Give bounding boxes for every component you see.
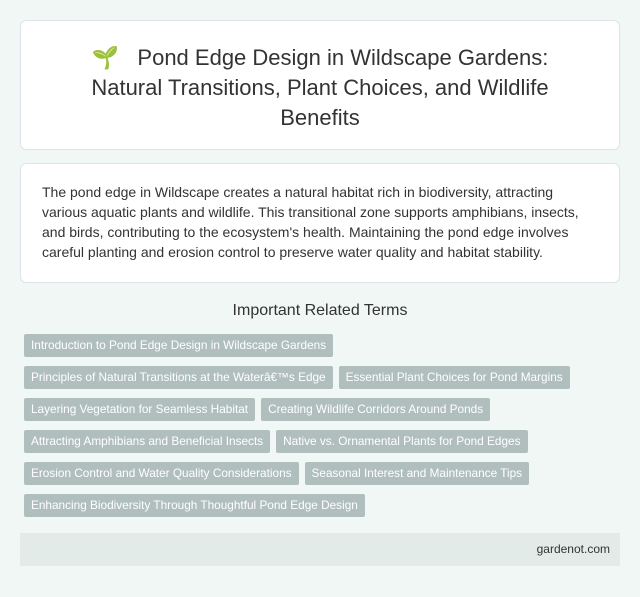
tag 8: Erosion Control and Water Quality Considerations xyxy=(31,466,292,480)
tag 9 xyxy=(305,462,529,485)
tag 4 xyxy=(24,398,255,421)
tag 8 xyxy=(24,462,299,485)
tag 3: Essential Plant Choices for Pond Margins xyxy=(346,370,563,384)
title card xyxy=(20,20,620,150)
tags xyxy=(24,334,570,517)
tag 2 xyxy=(24,366,333,389)
tag 9: Seasonal Interest and Maintenance Tips xyxy=(312,466,522,480)
tag 7 xyxy=(276,430,528,453)
tag 6 xyxy=(24,430,270,453)
tag 2: Principles of Natural Transitions at the Waterâ€™s Edge xyxy=(31,370,326,384)
tag 1 xyxy=(24,334,333,357)
tag 5 xyxy=(261,398,490,421)
tag 5: Creating Wildlife Corridors Around Ponds xyxy=(268,402,483,416)
tag 1: Introduction to Pond Edge Design in Wildscape Gardens xyxy=(31,338,326,352)
tag 10 xyxy=(24,494,365,517)
tag 10: Enhancing Biodiversity Through Thoughtful Pond Edge Design xyxy=(31,498,358,512)
description card xyxy=(20,163,620,283)
tag 7: Native vs. Ornamental Plants for Pond Edges xyxy=(283,434,521,448)
title: 🌱 Pond Edge Design in Wildscape Gardens: Natural Transitions, Plant Choices, and Wildlife Benefits xyxy=(91,45,549,130)
heading: related terms: Important Related Terms xyxy=(233,302,407,319)
tag 4: Layering Vegetation for Seamless Habitat xyxy=(31,402,248,416)
tag 3 xyxy=(339,366,570,389)
description text: The pond edge in Wildscape creates a natural habitat rich in biodiversity, attracting various aquatic plants and wildlife. This transitional zone supports amphibians, insects, and birds, contributing to the ecosystem's health. Maintaining the pond edge involves careful planting and erosion control to preserve water quality and habitat stability. xyxy=(42,184,579,260)
tag 6: Attracting Amphibians and Beneficial Insects xyxy=(31,434,263,448)
footer text: gardenot.com xyxy=(537,542,610,556)
footer xyxy=(20,533,620,566)
